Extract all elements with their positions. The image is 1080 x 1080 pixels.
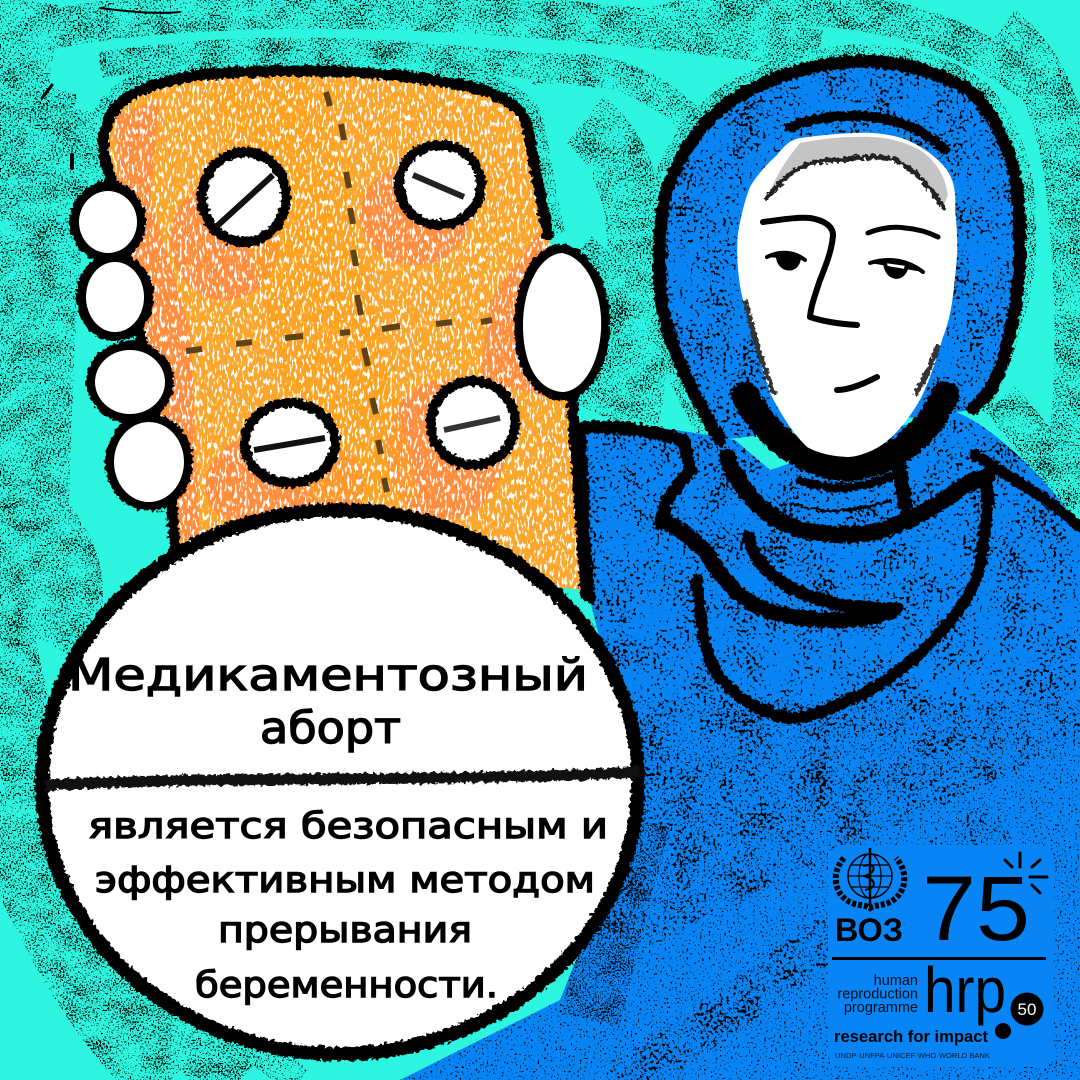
- HRP 50 badge: 50: [1018, 1000, 1036, 1019]
- WHO emblem: [836, 848, 904, 908]
- title: аборт: [260, 703, 401, 754]
- pill top left: [202, 152, 286, 242]
- HRP mark: hrp: [924, 954, 1006, 1026]
- left eye: [767, 253, 805, 269]
- pill bottom left: [245, 403, 335, 483]
- woman: body and scarf: [380, 410, 1080, 1080]
- large white pill callout: [42, 510, 640, 1054]
- pill score line: [45, 772, 640, 785]
- HRP label: human: [874, 973, 918, 989]
- body text: эффективным методом: [95, 860, 595, 901]
- HRP label: reproduction: [837, 986, 918, 1002]
- orange shading patches: [115, 100, 560, 540]
- woman: face: [737, 133, 957, 457]
- woman: neck shadow: [745, 395, 945, 468]
- hair band: [767, 137, 948, 207]
- divider: [832, 957, 1046, 960]
- title: Медикаментозный: [68, 650, 588, 701]
- logos: [828, 845, 1054, 1067]
- body text: [88, 806, 608, 1006]
- WHO 75 mark: 75: [922, 858, 1030, 960]
- WHO label: ВОЗ: [835, 912, 903, 948]
- chalk fringe around shapes: [103, 71, 548, 510]
- HRP 50 badge: [995, 992, 1044, 1039]
- right eye: [870, 260, 923, 277]
- right brow: [868, 227, 938, 237]
- title: [68, 650, 588, 754]
- body text: беременности.: [195, 965, 498, 1006]
- tagline: research for impact: [834, 1027, 988, 1046]
- body text: является безопасным и: [88, 806, 608, 847]
- logo backing: [828, 845, 1054, 1067]
- blister perforation lines: [186, 92, 492, 492]
- left brow and nose: [763, 218, 857, 325]
- body text: прерывания: [218, 910, 472, 951]
- HRP label: programme: [844, 1000, 918, 1016]
- mouth: [837, 377, 877, 390]
- pill bottom right: [431, 381, 515, 465]
- partners line: UNDP·UNFPA·UNICEF·WHO·WORLD BANK: [835, 1051, 990, 1060]
- cheek shadows: [745, 300, 938, 395]
- HRP label: [837, 973, 918, 1016]
- blister pack: [100, 60, 590, 600]
- pill top right: [399, 145, 481, 225]
- hand: fingers and thumb: [76, 187, 604, 505]
- woman: hood: [650, 60, 1030, 460]
- hair line: [767, 157, 943, 207]
